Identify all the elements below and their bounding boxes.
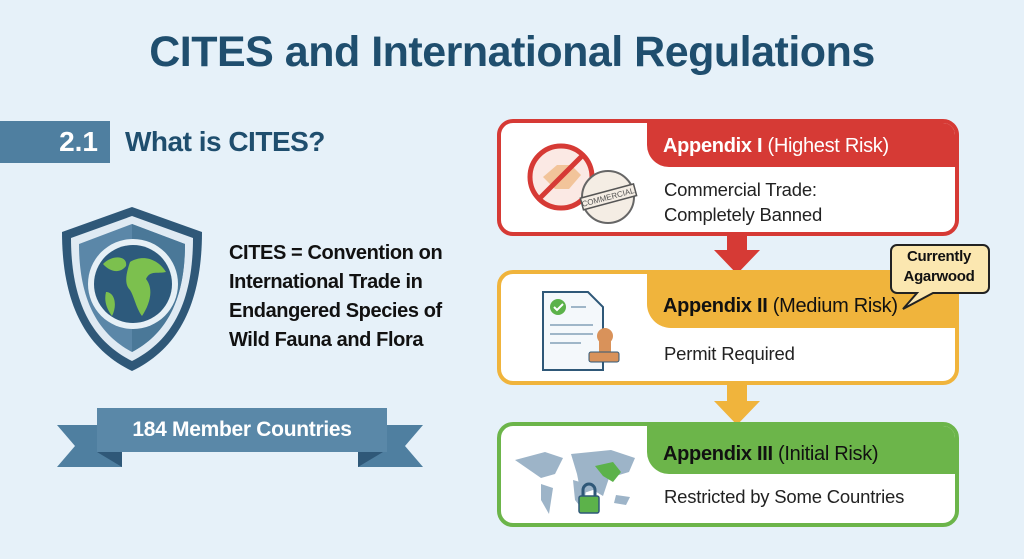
header: appendix I (647, 123, 955, 167)
definition text: International Trade in (229, 271, 422, 293)
definition text (229, 242, 442, 351)
icon: shield globe (62, 207, 202, 371)
definition text: Wild Fauna and Flora (229, 329, 423, 351)
callout: currently agarwood: Currently (907, 248, 971, 265)
panel: appendix II (497, 270, 959, 385)
text: banned: Completely Banned (664, 204, 822, 225)
header: appendix III (647, 426, 955, 474)
ribbon: member countries (57, 408, 423, 467)
section label: 2.1 (59, 126, 98, 157)
title: CITES and International Regulations (149, 28, 875, 76)
header: appendix II (647, 274, 955, 328)
ribbon: member countries: 184 Member Countries (132, 418, 352, 441)
icon: permit document (542, 291, 620, 371)
callout: currently agarwood (890, 244, 990, 310)
panel: appendix I (497, 119, 959, 236)
panel: appendix III (497, 422, 959, 527)
header: appendix I: Appendix I (Highest Risk) (663, 135, 889, 157)
icon: no trade: COMMERCIAL (581, 186, 636, 209)
icon: map with lock (515, 450, 635, 514)
text: permit: Permit Required (664, 343, 795, 364)
section label: What is CITES? (125, 126, 325, 157)
callout: currently agarwood: Agarwood (904, 268, 974, 285)
arrow: red (714, 236, 760, 270)
definition text: Endangered Species of (229, 300, 442, 322)
header: appendix II: Appendix II (Medium Risk) (663, 295, 898, 317)
arrow: orange (714, 385, 760, 422)
text: banned: Commercial Trade: (664, 179, 817, 200)
icon: no trade (528, 144, 638, 224)
section label (0, 121, 325, 163)
text: restricted: Restricted by Some Countries (664, 486, 904, 507)
definition text: CITES = Convention on (229, 242, 442, 264)
text: banned (664, 179, 822, 225)
header: appendix III: Appendix III (Initial Risk) (663, 443, 878, 465)
